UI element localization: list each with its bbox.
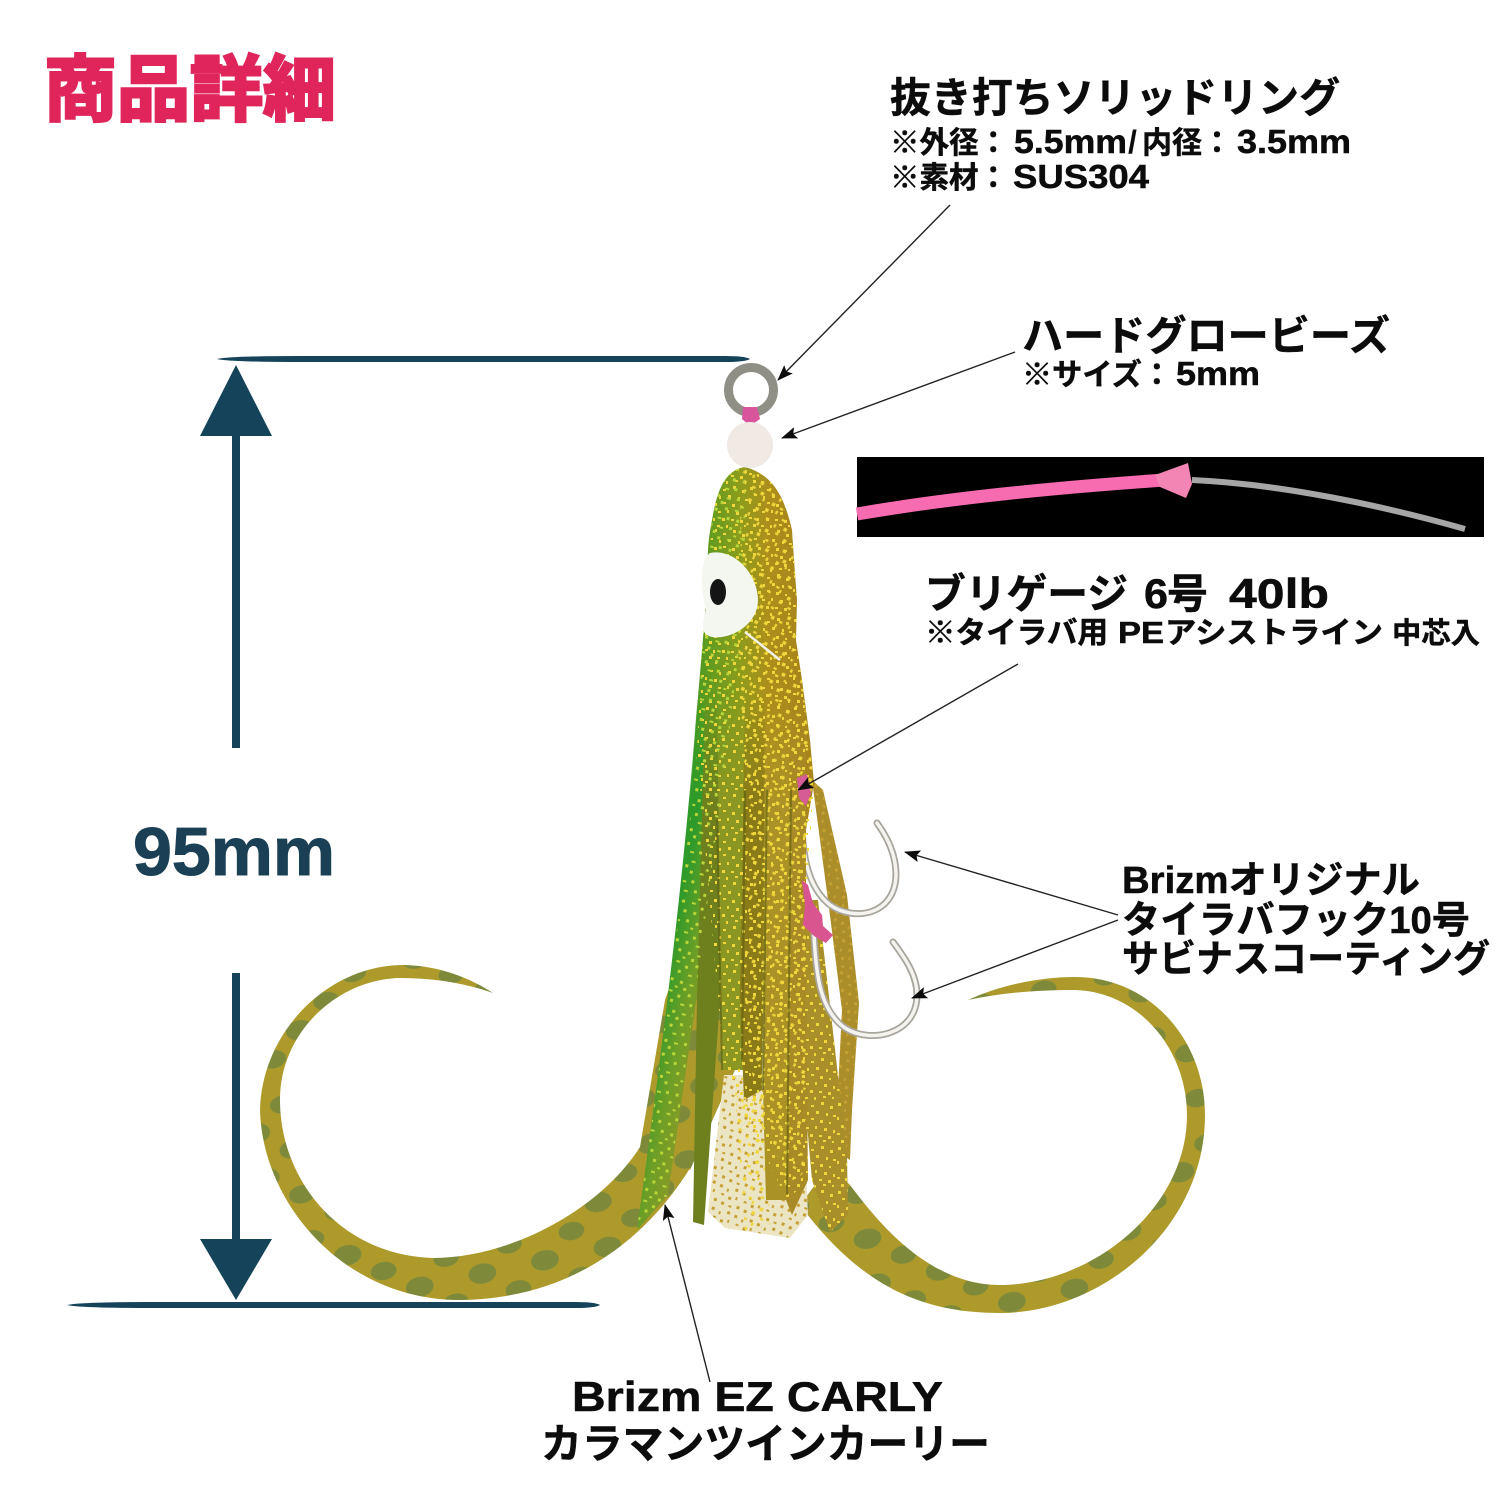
dark thin tentacle (693, 704, 720, 1225)
text block: solid ring (890, 75, 1351, 195)
fishing hooks (801, 805, 917, 1035)
text block: hook: サビナスコーティング (1122, 939, 1490, 981)
text block: curly tail: Brizm EZ CARLY (572, 1373, 943, 1420)
title: 商品詳細 (44, 51, 336, 131)
text block: glow beads: ハードグロービーズ (1022, 313, 1390, 359)
text block: assist line: 40lb (1229, 570, 1329, 617)
text block: hook (1122, 860, 1490, 981)
pink PE line (857, 480, 1165, 514)
text block: assist line: 6 (1144, 570, 1168, 617)
lure illustration (260, 368, 1205, 1313)
glitter overlay gold (697, 467, 814, 1200)
text block: curly tail (541, 1373, 990, 1467)
down arrow (200, 973, 272, 1300)
hook lower (814, 935, 917, 1035)
skirt root behind tentacles (640, 900, 735, 1170)
text block: assist line: ブリゲージ (925, 571, 1128, 617)
text block: assist line: ※タイラバ用 (925, 617, 1108, 650)
white slit mark (745, 632, 780, 660)
leader: hook upper (905, 852, 1118, 915)
text block: glow beads (1022, 313, 1390, 392)
gold-green tentacle (718, 721, 743, 1070)
text block: solid ring: 3.5mm (1237, 123, 1351, 160)
text block: hook: タイラバフック10号 (1122, 900, 1470, 942)
leader: ring (778, 205, 950, 380)
text block: glow beads: 5mm (1176, 355, 1260, 392)
text block: solid ring: 5.5mm (1014, 123, 1127, 160)
text block: solid ring: ※素材： (890, 162, 1008, 195)
up arrow (200, 365, 272, 748)
dimension: 95mm height (67, 356, 750, 1308)
hook upper (801, 805, 896, 914)
pink knot upper (797, 774, 811, 806)
core grey line (1192, 480, 1465, 529)
eye (702, 552, 758, 637)
pink knot (742, 407, 760, 426)
bottom extent line (67, 1302, 600, 1308)
leader: bead (782, 352, 1015, 438)
leader: tail (665, 1205, 710, 1382)
tentacle strips (637, 700, 808, 1230)
text block: solid ring: 内径： (1142, 127, 1232, 160)
dark olive tentacle (740, 718, 765, 1100)
green tentacle (637, 700, 704, 1230)
text block: hook: Brizmオリジナル (1122, 860, 1420, 902)
rear right tentacle (812, 780, 859, 1160)
text block: solid ring: / (1128, 124, 1137, 160)
left curly tail (260, 965, 692, 1300)
text block: solid ring: 抜き打ちソリッドリング (890, 75, 1340, 121)
text block: solid ring: ※外径： (890, 127, 1008, 160)
pale lower tentacle tips (708, 1075, 808, 1238)
leader: line (798, 664, 1018, 790)
right curly tail (800, 977, 1205, 1313)
gold lower right tentacle (797, 900, 848, 1232)
text block: assist line: 号 (1167, 571, 1208, 617)
gold tentacle right (786, 700, 808, 1215)
pink knot lower (802, 880, 833, 943)
text block: curly tail: カラマンツインカーリー (541, 1421, 990, 1467)
tentacle dividers (717, 790, 791, 1195)
gold tentacle center (763, 718, 789, 1200)
glow bead (727, 422, 773, 468)
text block: assist line (925, 570, 1480, 650)
text block: glow beads: ※サイズ： (1022, 358, 1172, 392)
solid ring (728, 368, 774, 412)
tentacle skirt body (637, 467, 814, 1230)
text block: assist line: PE (1118, 615, 1164, 650)
panel: braided line photo (857, 457, 1484, 537)
dimension value: 95mm (133, 814, 335, 890)
text block: assist line: アシストライン (1165, 617, 1383, 650)
text block: solid ring: SUS304 (1013, 158, 1150, 195)
leader: hook lower (912, 920, 1118, 998)
glitter overlay lime (637, 467, 745, 1230)
text block: assist line: 中芯入 (1392, 617, 1480, 650)
top extent line (217, 356, 750, 362)
frayed end (1155, 463, 1192, 498)
